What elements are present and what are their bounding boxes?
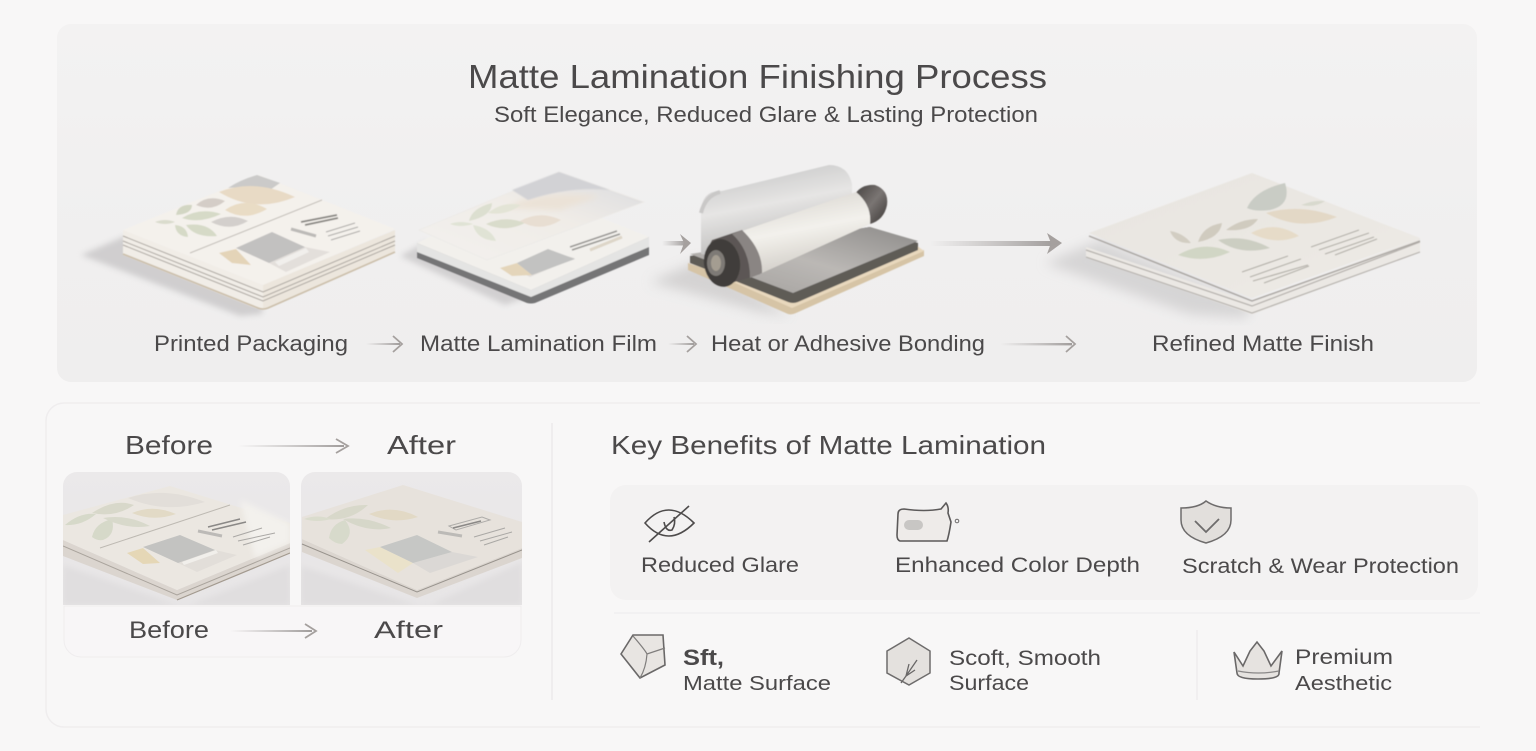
heading: key benefits: Key Benefits of Matte Lamination — [611, 430, 1046, 460]
icon: color depth swatch — [897, 503, 959, 541]
panel: before and after — [63, 430, 522, 657]
icon: matte surface — [621, 635, 665, 678]
text: reduced glare: Reduced Glare — [641, 554, 799, 577]
caption: after: After — [374, 617, 443, 644]
text: matte surface — [683, 645, 831, 695]
text: matte surface: Sft, — [683, 645, 724, 670]
caption bar — [64, 606, 521, 657]
icon: reduced glare eye — [645, 506, 694, 542]
arrow: before to after — [238, 439, 348, 453]
arrow: step 1 — [366, 336, 402, 352]
arrow: film to roller — [662, 234, 691, 254]
label: matte lamination film: Matte Lamination Film — [420, 331, 657, 356]
arrow: step 3 — [1000, 336, 1075, 352]
text: matte surface: Matte Surface — [683, 672, 831, 695]
arrow: roller to finish — [930, 233, 1062, 254]
illustration: roller machine — [650, 165, 924, 316]
arrow: caption — [230, 624, 316, 638]
text: premium aesthetic — [1295, 645, 1393, 695]
text: premium aesthetic: Aesthetic — [1295, 672, 1392, 695]
arrow: step 2 — [668, 336, 696, 352]
title: Matte Lamination Finishing Process — [468, 58, 1047, 95]
illustration: film over sheet — [400, 172, 649, 305]
panel: lower card — [46, 403, 1480, 727]
illustration: printed packaging stack — [81, 175, 395, 316]
heading: after: After — [387, 430, 456, 460]
icon: shield — [1181, 501, 1231, 543]
icon: smooth surface — [887, 638, 930, 685]
text: smooth surface: Scoft, Smooth — [949, 646, 1101, 670]
label: refined matte finish: Refined Matte Finish — [1152, 331, 1374, 356]
label: heat or adhesive bonding: Heat or Adhesive Bonding — [711, 331, 985, 356]
image: after sheet — [301, 472, 522, 605]
label: printed packaging: Printed Packaging — [154, 331, 348, 356]
subtitle: Soft Elegance, Reduced Glare & Lasting Protection — [494, 102, 1038, 127]
panel: process — [57, 24, 1477, 382]
text: scratch and wear protection: Scratch & Wear Protection — [1182, 555, 1459, 578]
caption: before: Before — [129, 617, 209, 644]
text: smooth surface: Surface — [949, 672, 1029, 695]
text: smooth surface — [949, 646, 1101, 695]
text: enhanced color depth: Enhanced Color Depth — [895, 554, 1140, 577]
heading: before: Before — [125, 430, 213, 460]
panel: main benefits — [610, 485, 1478, 600]
illustration: refined matte finish — [1045, 173, 1420, 318]
image: before sheet — [63, 472, 290, 605]
text: premium aesthetic: Premium — [1295, 645, 1393, 669]
icon: crown — [1234, 642, 1282, 679]
